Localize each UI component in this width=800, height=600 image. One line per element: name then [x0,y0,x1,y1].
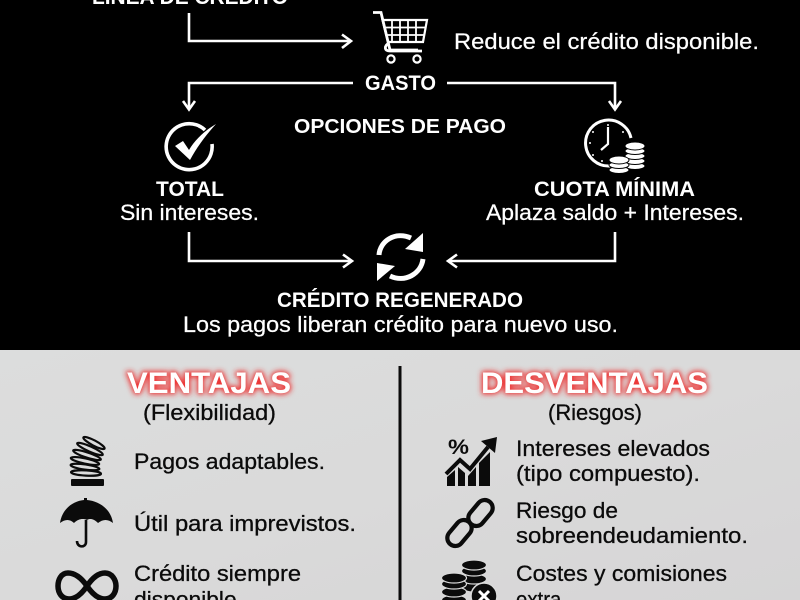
text: intereses elevados [516,436,710,486]
arrow: total to crédito regenerado [189,232,352,268]
text: los pagos liberan crédito: Los pagos liberan crédito para nuevo uso. [183,312,618,337]
subheading: flexibilidad: (Flexibilidad) [143,400,276,425]
heading: desventajas: DESVENTAJAS [481,367,708,400]
icon: shopping cart [373,12,427,63]
heading: ventajas: VENTAJAS [127,367,291,400]
heading: desventajas: DESVENTAJAS [481,367,708,400]
text: crédito siempre disponible [134,561,301,600]
icon: refresh [377,233,423,281]
text: riesgo de sobreendeudamiento: sobreendeudamiento. [516,523,748,548]
text: sin intereses: Sin intereses. [120,200,259,225]
arrow: cuota mínima to crédito regenerado [448,232,615,268]
label: gasto: GASTO [365,72,436,95]
icon: check circle [166,124,216,170]
text: intereses elevados: Intereses elevados [516,436,710,461]
icon: chain link [444,497,496,549]
panel: pros and cons [0,350,800,600]
arrow: gasto to cuota mínima [447,83,621,110]
text: riesgo de sobreendeudamiento: Riesgo de [516,498,618,523]
icon: umbrella [60,498,113,546]
icon: infinity [58,573,116,599]
icon: coins with x [442,560,497,600]
text: útil para imprevistos: Útil para imprevistos. [134,511,356,536]
heading: ventajas: VENTAJAS [127,367,291,400]
icon: rising chart with percent: % [448,436,469,459]
text: aplaza saldo: Aplaza saldo + Intereses. [486,200,744,225]
label: crédito regenerado: CRÉDITO REGENERADO [277,289,523,312]
text: reduce el crédito disponible: Reduce el crédito disponible. [454,29,759,54]
label: cuota mínima: CUOTA MÍNIMA [534,178,695,201]
arrow: línea de crédito to gasto [189,13,351,48]
arrow: gasto to total [183,83,353,110]
icon: clock and coins [586,120,645,174]
label: total: TOTAL [156,178,224,201]
icon: rising chart with percent [446,436,497,486]
panel: credit cycle [0,0,800,350]
subheading: riesgos: (Riesgos) [548,400,642,425]
text: riesgo de sobreendeudamiento [516,498,748,548]
text: intereses elevados: (tipo compuesto). [516,461,700,486]
text: costes y comisiones [516,561,727,600]
heading: opciones de pago: OPCIONES DE PAGO [294,116,506,138]
text: crédito siempre disponible: Crédito siempre [134,561,301,586]
text: costes y comisiones: Costes y comisiones [516,561,727,586]
text: pagos adaptables: Pagos adaptables. [134,449,325,474]
icon: spring [70,435,106,486]
